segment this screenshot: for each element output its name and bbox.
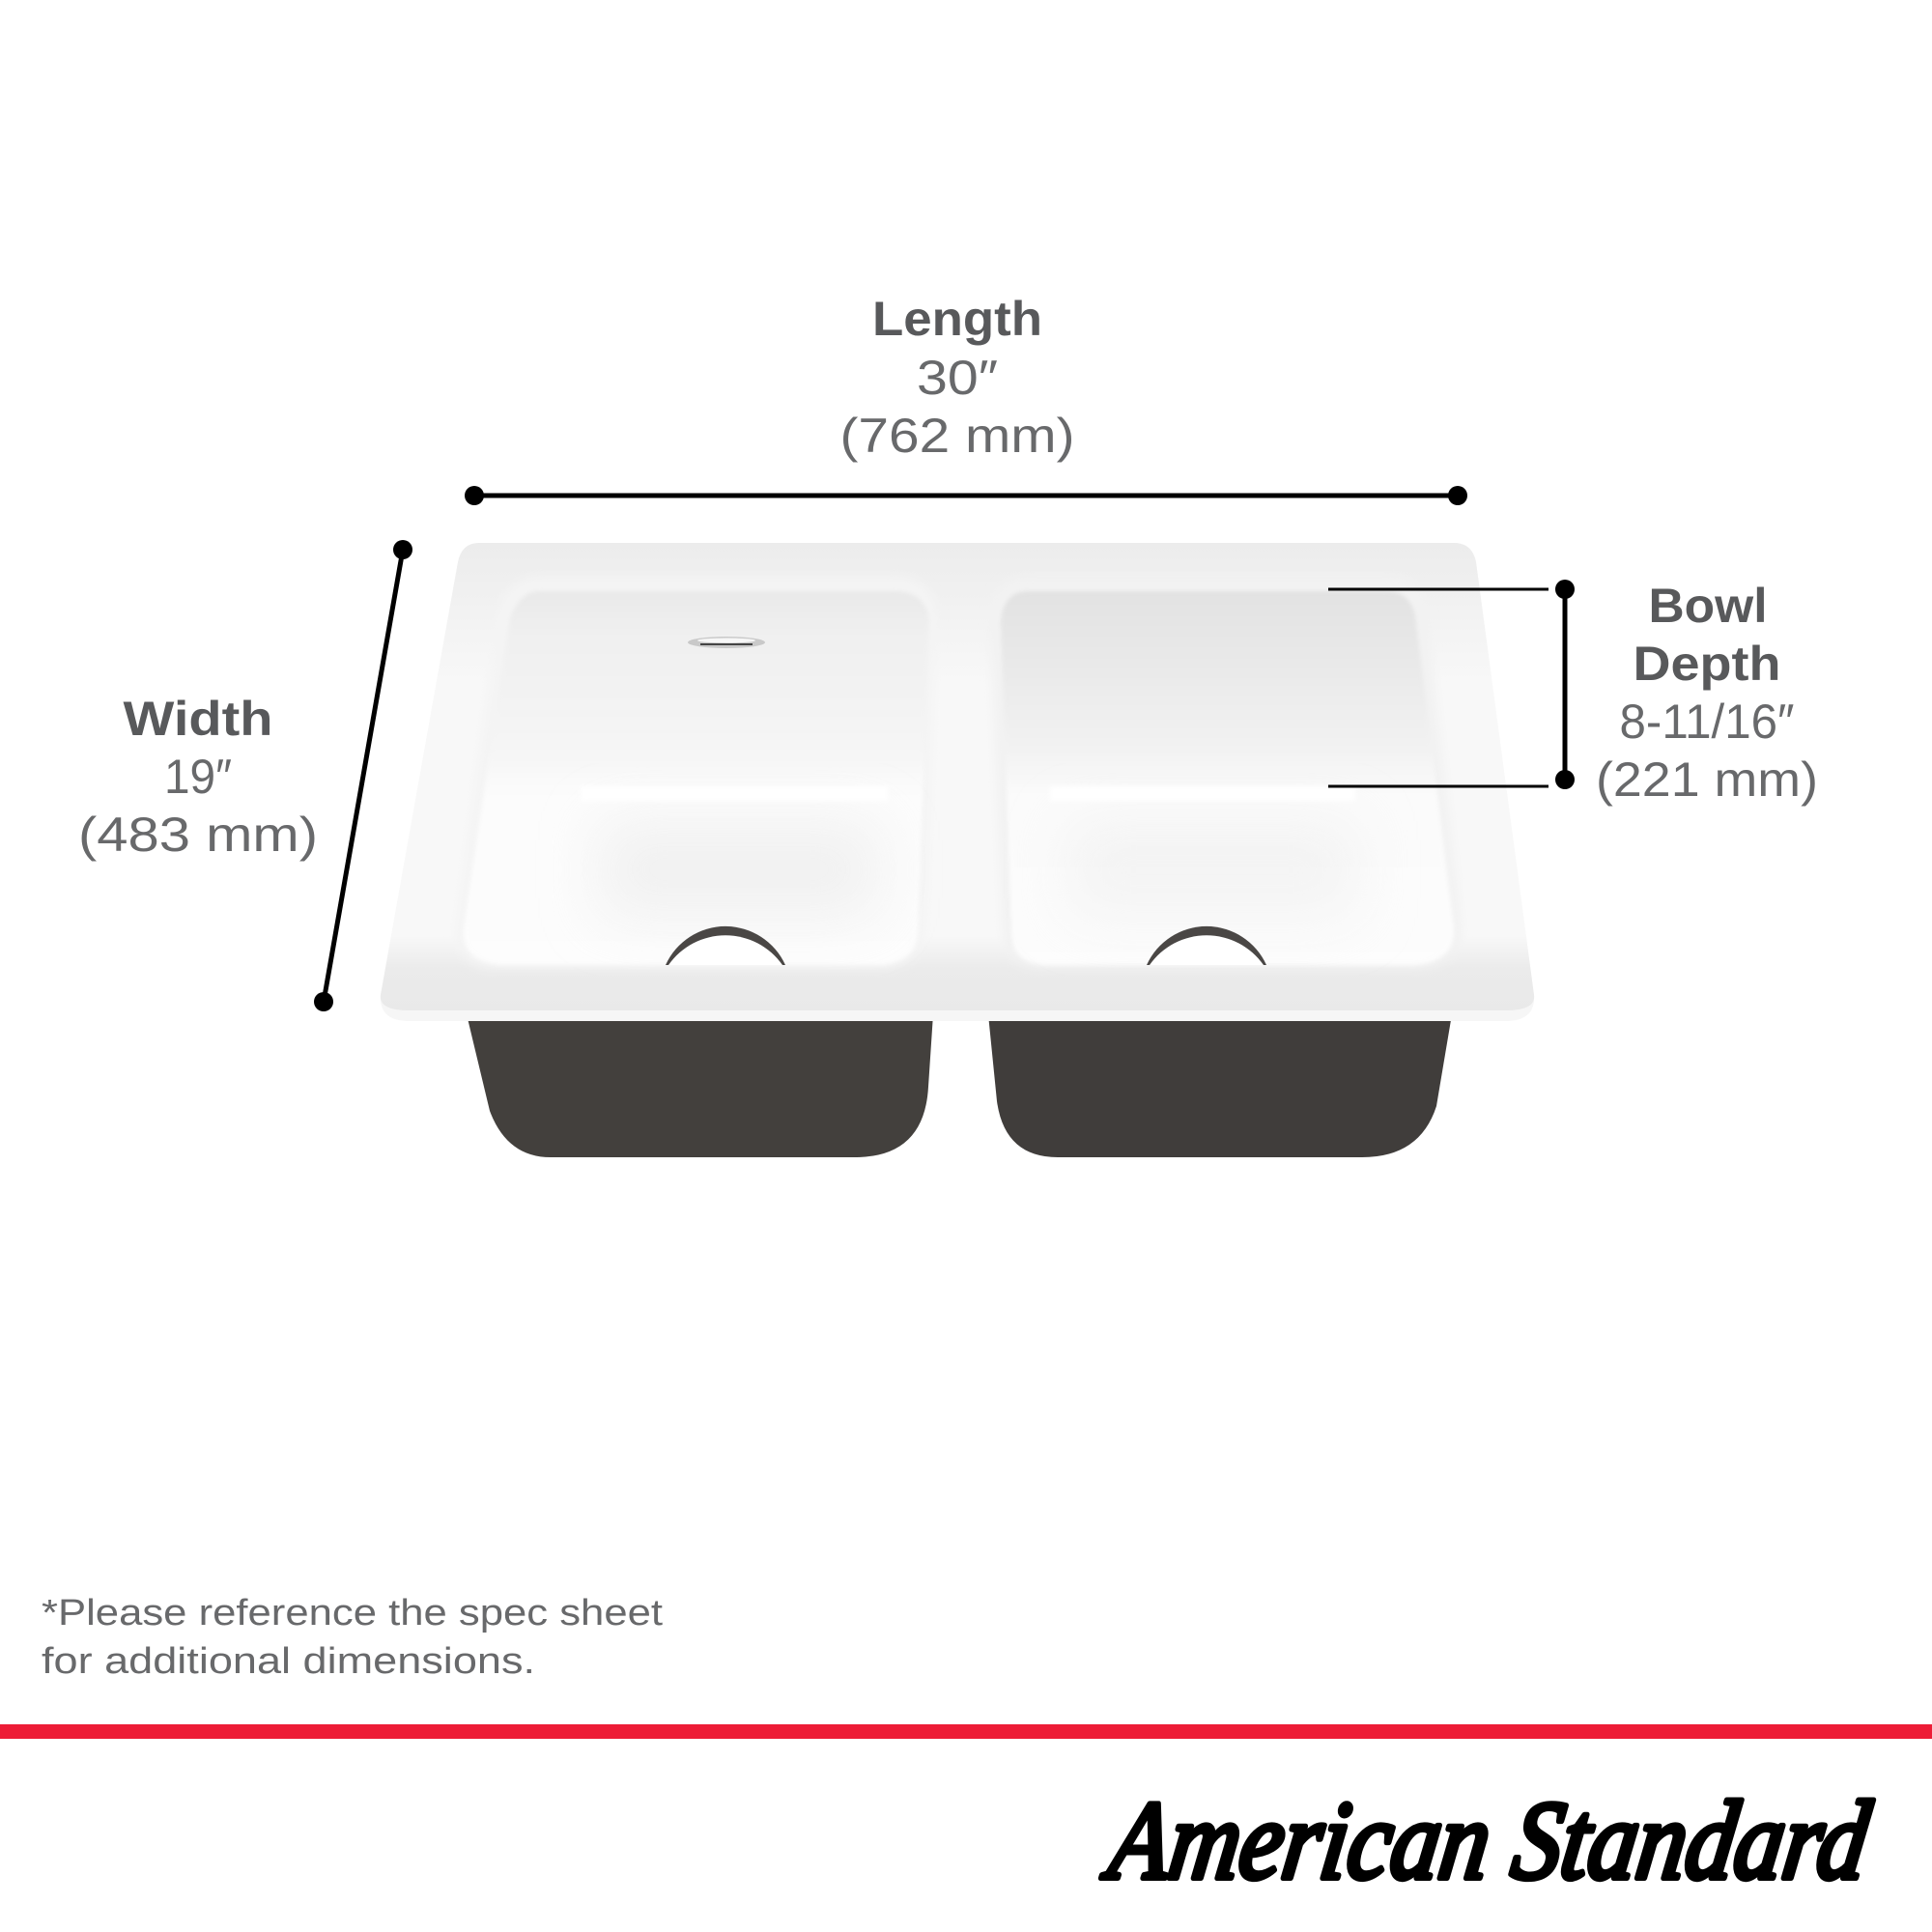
left bowl ledge highlight [581,786,888,801]
red divider bar [0,1724,1932,1739]
right drain hole [1147,926,1266,965]
right bowl ledge highlight [1050,786,1355,801]
length label: Length [872,292,1042,346]
bowl depth label: (221 mm) [1596,753,1818,807]
bowl depth dimension line [1328,580,1575,789]
right bowl interior [1001,591,1454,965]
bowl depth label: 8-11/16″ [1619,695,1795,749]
right bowl rim [989,577,1462,969]
deck lip [381,543,1534,1021]
bowl depth label: Bowl [1648,579,1768,633]
right bowl lower shading [1067,821,1357,918]
bowl depth label [1596,579,1818,807]
left bowl interior [464,591,929,965]
length label [840,292,1074,463]
length label: (762 mm) [840,409,1074,463]
left bowl [456,577,937,969]
right bowl [989,577,1462,969]
dark underside of right basin [988,1014,1452,1157]
left drain hole [666,926,785,965]
overflow cover [688,637,765,648]
footnote: *Please reference the spec sheet [42,1593,664,1634]
width label [78,692,318,862]
left bowl lower shading [599,821,879,918]
width label: 19″ [164,750,232,804]
footnote: for additional dimensions. [42,1641,535,1682]
bowl depth label: Depth [1633,637,1781,691]
length label: 30″ [917,351,998,405]
footnote [42,1593,664,1682]
deck top surface [381,543,1534,1010]
dark underside of left basin [467,1014,933,1157]
length dimension line [465,486,1467,505]
left bowl rim [456,577,937,969]
sink deck [381,543,1534,1021]
width label: Width [124,692,272,746]
width label: (483 mm) [78,808,318,862]
width dimension line [314,540,412,1011]
